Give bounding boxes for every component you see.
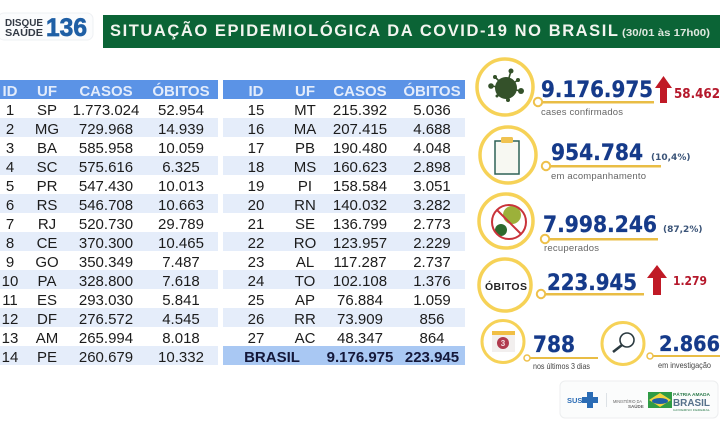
table: states 1 to 14: 52.954: [158, 102, 204, 119]
table: states 1 to 14: ID: [2, 83, 18, 100]
table: states 15 to 27 and Brasil total: 207.415: [333, 121, 387, 138]
table: states 15 to 27 and Brasil total: 102.108: [333, 273, 387, 290]
logo: Disque Saúde 136: SAÚDE: [5, 26, 43, 39]
table: states 1 to 14: 6: [6, 197, 14, 214]
table: states 15 to 27 and Brasil total: 123.957: [333, 235, 387, 252]
table: states 1 to 14: 4.545: [162, 311, 200, 328]
table: states 1 to 14: SC: [37, 159, 58, 176]
table: states 1 to 14: 14: [2, 349, 18, 366]
table: states 1 to 14: MG: [35, 121, 59, 138]
table: states 15 to 27 and Brasil total: 117.287: [333, 254, 387, 271]
table: states 15 to 27 and Brasil total: RO: [294, 235, 316, 252]
table: states 1 to 14: 6.325: [162, 159, 200, 176]
table: states 15 to 27 and Brasil total: 1.376: [413, 273, 451, 290]
table: states 1 to 14: 370.300: [79, 235, 133, 252]
stat: em investigação: em investigação: [658, 360, 711, 370]
table: states 1 to 14: 13: [2, 330, 18, 347]
table: states 1 to 14: 547.430: [79, 178, 133, 195]
table: states 15 to 27 and Brasil total: 20: [248, 197, 264, 214]
table: states 15 to 27 and Brasil total: MA: [294, 121, 316, 138]
table: states 15 to 27 and Brasil total: 22: [248, 235, 264, 252]
logos: SUS, Ministério da Saúde, Pátria Amada Brasil: SAÚDE: [628, 403, 644, 409]
table: states 1 to 14: 10.013: [158, 178, 204, 195]
title banner: [103, 15, 720, 48]
table: states 15 to 27 and Brasil total: 158.584: [333, 178, 387, 195]
table: states 1 to 14: 328.800: [79, 273, 133, 290]
table: states 15 to 27 and Brasil total: 864: [419, 330, 445, 347]
table: states 1 to 14: PA: [38, 273, 56, 290]
table: states 1 to 14: 1.773.024: [73, 102, 139, 119]
table: states 1 to 14: 293.030: [79, 292, 133, 309]
table: states 1 to 14: AM: [36, 330, 58, 347]
table: states 1 to 14: DF: [37, 311, 57, 328]
table: states 15 to 27 and Brasil total: 2.229: [413, 235, 451, 252]
table: states 1 to 14: 10.663: [158, 197, 204, 214]
table: states 15 to 27 and Brasil total: 25: [248, 292, 264, 309]
table: states 1 to 14: 10.059: [158, 140, 204, 157]
table: states 15 to 27 and Brasil total: 21: [248, 216, 264, 233]
table: states 15 to 27 and Brasil total: ID: [248, 83, 264, 100]
table: states 15 to 27 and Brasil total: 18: [248, 159, 264, 176]
table: states 1 to 14: 729.968: [79, 121, 133, 138]
table: states 1 to 14: 520.730: [79, 216, 133, 233]
table: states 1 to 14: UF: [37, 83, 57, 100]
logos: SUS, Ministério da Saúde, Pátria Amada Brasil: [560, 381, 718, 418]
table: states 15 to 27 and Brasil total: 223.945: [405, 349, 459, 366]
icon: óbitos badge: ÓBITOS: [485, 280, 527, 293]
stat: casos confirmados: 9.176.975: [541, 78, 653, 103]
table: states 1 to 14: 7.487: [162, 254, 200, 271]
table: states 1 to 14: 7: [6, 216, 14, 233]
table: states 1 to 14: ÓBITOS: [152, 82, 210, 100]
table: states 15 to 27 and Brasil total: AC: [295, 330, 316, 347]
table: states 1 to 14: RS: [37, 197, 57, 214]
table: states 1 to 14: [0, 80, 218, 366]
icon: red up arrow: [647, 265, 667, 295]
logo: Disque Saúde 136: 136: [46, 14, 87, 42]
table: states 1 to 14: 8.018: [162, 330, 200, 347]
table: states 1 to 14: 8: [6, 235, 14, 252]
icon: red up arrow: [655, 76, 672, 103]
icon: virus: [477, 59, 533, 115]
table: states 1 to 14: 14.939: [158, 121, 204, 138]
stat: nos últimos 3 dias: [482, 320, 598, 371]
table: states 1 to 14: 12: [2, 311, 18, 328]
table: states 15 to 27 and Brasil total: 2.898: [413, 159, 451, 176]
table: states 1 to 14: 260.679: [79, 349, 133, 366]
title banner: SITUAÇÃO EPIDEMIOLÓGICA DA COVID-19 NO BRASIL: [110, 20, 618, 40]
table: states 1 to 14: 265.994: [79, 330, 133, 347]
table: states 1 to 14: 7.618: [162, 273, 200, 290]
table: states 1 to 14: 5: [6, 178, 14, 195]
table: states 15 to 27 and Brasil total: 9.176.975: [327, 349, 393, 366]
stat: recuperados: 7.998.246: [543, 213, 657, 238]
table: states 15 to 27 and Brasil total: 136.799: [333, 216, 387, 233]
table: states 1 to 14: 585.958: [79, 140, 133, 157]
logo: Disque Saúde 136: DISQUE: [5, 17, 43, 29]
table: states 1 to 14: 29.789: [158, 216, 204, 233]
table: states 15 to 27 and Brasil total: 4.048: [413, 140, 451, 157]
stat: óbitos: [479, 259, 707, 311]
table: states 1 to 14: 3: [6, 140, 14, 157]
table: states 1 to 14: 276.572: [79, 311, 133, 328]
table: states 15 to 27 and Brasil total: 76.884: [337, 292, 383, 309]
table: states 1 to 14: 350.349: [79, 254, 133, 271]
table: states 15 to 27 and Brasil total: 140.032: [333, 197, 387, 214]
table: states 15 to 27 and Brasil total: 160.623: [333, 159, 387, 176]
table: states 15 to 27 and Brasil total: 15: [248, 102, 264, 119]
logos: SUS, Ministério da Saúde, Pátria Amada Brasil: SUS: [567, 396, 582, 405]
table: states 1 to 14: 2: [6, 121, 14, 138]
table: states 1 to 14: RJ: [38, 216, 56, 233]
table: states 15 to 27 and Brasil total: 4.688: [413, 121, 451, 138]
table: states 1 to 14: 9: [6, 254, 14, 271]
table: states 15 to 27 and Brasil total: 19: [248, 178, 264, 195]
table: states 15 to 27 and Brasil total: 23: [248, 254, 264, 271]
stat: em investigação: [602, 322, 720, 370]
table: states 15 to 27 and Brasil total: 3.282: [413, 197, 451, 214]
table: states 15 to 27 and Brasil total: 215.392: [333, 102, 387, 119]
table: states 1 to 14: 575.616: [79, 159, 133, 176]
table: states 1 to 14: PE: [37, 349, 57, 366]
stat: casos confirmados: [477, 59, 720, 118]
table: states 15 to 27 and Brasil total: 2.737: [413, 254, 451, 271]
table: states 1 to 14: CASOS: [79, 83, 133, 100]
stat: nos últimos 3 dias: 788: [533, 333, 575, 358]
table: states 15 to 27 and Brasil total: BRASIL: [244, 349, 300, 366]
table: states 15 to 27 and Brasil total: 27: [248, 330, 264, 347]
table: states 1 to 14: SP: [37, 102, 57, 119]
table: states 15 to 27 and Brasil total: SE: [295, 216, 315, 233]
stat: óbitos: 223.945: [547, 271, 637, 296]
table: states 15 to 27 and Brasil total: [223, 80, 465, 366]
table: states 15 to 27 and Brasil total: 3.051: [413, 178, 451, 195]
stat: em acompanhamento: 954.784: [551, 141, 643, 166]
table: states 15 to 27 and Brasil total: RR: [294, 311, 316, 328]
table: states 15 to 27 and Brasil total: AP: [295, 292, 315, 309]
table: states 15 to 27 and Brasil total: AL: [296, 254, 314, 271]
table: states 15 to 27 and Brasil total: PB: [295, 140, 315, 157]
table: states 15 to 27 and Brasil total: ÓBITOS: [403, 82, 461, 100]
table: states 15 to 27 and Brasil total: 16: [248, 121, 264, 138]
table: states 15 to 27 and Brasil total: 48.347: [337, 330, 383, 347]
table: states 1 to 14: 10.332: [158, 349, 204, 366]
table: states 15 to 27 and Brasil total: PI: [298, 178, 312, 195]
table: states 15 to 27 and Brasil total: MT: [294, 102, 316, 119]
table: states 15 to 27 and Brasil total: 5.036: [413, 102, 451, 119]
table: states 1 to 14: 5.841: [162, 292, 200, 309]
stat: em acompanhamento: (10,4%): [651, 153, 690, 163]
table: states 15 to 27 and Brasil total: 26: [248, 311, 264, 328]
stat: em acompanhamento: [480, 127, 690, 183]
stat: recuperados: (87,2%): [663, 225, 702, 235]
table: states 1 to 14: 546.708: [79, 197, 133, 214]
table: states 15 to 27 and Brasil total: 2.773: [413, 216, 451, 233]
stat: óbitos: 1.279: [673, 274, 707, 288]
table: states 15 to 27 and Brasil total: 73.909: [337, 311, 383, 328]
stat: recuperados: recuperados: [544, 243, 599, 254]
table: states 1 to 14: CE: [37, 235, 57, 252]
title banner: (30/01 às 17h00): [622, 28, 710, 39]
table: states 15 to 27 and Brasil total: TO: [295, 273, 315, 290]
stat: nos últimos 3 dias: nos últimos 3 dias: [533, 361, 590, 371]
table: states 1 to 14: BA: [37, 140, 57, 157]
table: states 1 to 14: 10: [2, 273, 18, 290]
icon: calendar: 3: [501, 339, 506, 348]
table: states 1 to 14: GO: [35, 254, 59, 271]
table: states 1 to 14: ES: [37, 292, 57, 309]
table: states 1 to 14: 11: [2, 292, 18, 309]
logos: SUS, Ministério da Saúde, Pátria Amada Brasil: BRASIL: [673, 397, 711, 409]
icon: crossed-out virus: [479, 194, 533, 248]
table: states 15 to 27 and Brasil total: 17: [248, 140, 264, 157]
logos: SUS, Ministério da Saúde, Pátria Amada Brasil: MINISTÉRIO DA: [613, 398, 642, 404]
table: states 1 to 14: 10.465: [158, 235, 204, 252]
table: states 15 to 27 and Brasil total: 190.480: [333, 140, 387, 157]
table: states 1 to 14: PR: [37, 178, 58, 195]
table: states 15 to 27 and Brasil total: 856: [419, 311, 445, 328]
stat: casos confirmados: cases confirmados: [541, 107, 623, 118]
table: states 15 to 27 and Brasil total: MS: [294, 159, 316, 176]
icon: magnifying glass: [602, 322, 644, 364]
logos: SUS, Ministério da Saúde, Pátria Amada Brasil: GOVERNO FEDERAL: [673, 408, 710, 412]
table: states 1 to 14: 1: [6, 102, 14, 119]
table: states 15 to 27 and Brasil total: CASOS: [333, 83, 387, 100]
stat: em acompanhamento: em acompanhamento: [551, 171, 646, 182]
table: states 1 to 14: 4: [6, 159, 14, 176]
table: states 15 to 27 and Brasil total: UF: [295, 83, 315, 100]
logos: SUS, Ministério da Saúde, Pátria Amada Brasil: PÁTRIA AMADA: [673, 391, 711, 397]
stat: recuperados: [479, 194, 702, 254]
icon: óbitos badge: [479, 259, 531, 311]
icon: clipboard: [480, 127, 536, 183]
table: states 15 to 27 and Brasil total: 1.059: [413, 292, 451, 309]
table: states 15 to 27 and Brasil total: RN: [294, 197, 316, 214]
table: states 15 to 27 and Brasil total: 24: [248, 273, 264, 290]
logo: Disque Saúde 136: [0, 13, 93, 42]
